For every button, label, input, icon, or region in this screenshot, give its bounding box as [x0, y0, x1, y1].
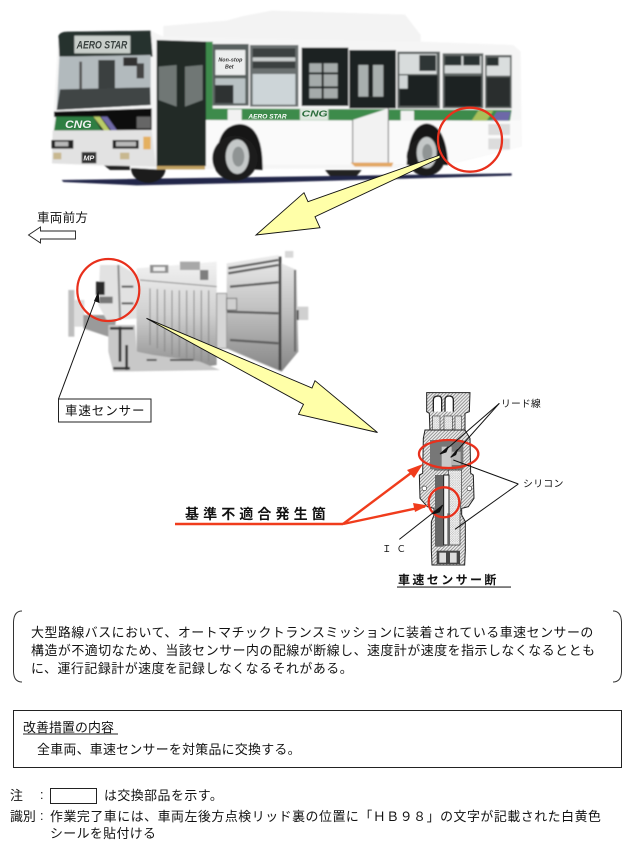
- yellow arrow from transmission to sensor: [146, 318, 378, 432]
- front casing: [98, 265, 142, 320]
- front lower: [52, 130, 156, 167]
- bus lettering: Bet: [225, 64, 234, 70]
- front mask: [58, 31, 153, 57]
- front tyre: [131, 154, 166, 183]
- bus lettering: AERO STAR: [76, 39, 128, 51]
- green band: [205, 108, 512, 121]
- callout: speed sensor label: 車速センサー: [65, 404, 145, 418]
- bus lettering: CNG: [65, 119, 92, 131]
- red arrows to failure location: [175, 464, 428, 524]
- icon: front direction arrow: [28, 227, 76, 243]
- sensor mid housing: [419, 430, 474, 565]
- rear door: [353, 108, 388, 163]
- leader lines: [399, 403, 518, 539]
- panel: defect description: に、運行記録計が速度を記録しなくなるそれがある。: [31, 661, 353, 676]
- heading: non-conformity location: 基準不適合発生箇: [185, 506, 330, 522]
- output flange: [68, 290, 74, 337]
- bus body: [52, 31, 522, 169]
- label: lead wire: リード線: [501, 397, 541, 410]
- note: replacement parts: [10, 788, 223, 804]
- windshield: [57, 55, 151, 110]
- bus lettering: [65, 39, 328, 163]
- sensor cross-section diagram: [399, 393, 518, 565]
- yellow arrow from bus to transmission: [256, 155, 440, 235]
- note: identification: :: [40, 809, 43, 823]
- red marker circles: [419, 440, 478, 517]
- bus lettering: CNG: [302, 109, 328, 119]
- transmission drawing: [68, 251, 308, 372]
- callout: speed sensor label: [58, 399, 151, 422]
- front door: [157, 40, 206, 167]
- wheels: [217, 124, 263, 170]
- panel: defect description: 構造が不適切なため、当該センサー内の配線が断線し、速度計が速度を指示しなくなるととも: [31, 643, 596, 658]
- callout: speed sensor pointer: [58, 291, 100, 399]
- internal cavity: [430, 440, 463, 469]
- connector top: [427, 393, 470, 433]
- label: IC: ＩＣ: [382, 544, 411, 555]
- roof tank: [163, 11, 421, 43]
- panel: corrective action: 改善措置の内容: [23, 720, 114, 735]
- bus lettering: AERO STAR: [247, 114, 287, 121]
- note: identification: 作業完了車には、車両左後方点検リッド裏の位置に「ＨＢ９８」の文字が記載された白黄色: [50, 809, 601, 824]
- bell housing: [227, 255, 298, 372]
- panel: corrective action: 全車両、車速センサーを対策品に交換する。: [37, 742, 301, 757]
- red circle on bus rear: [438, 108, 502, 172]
- note: identification: [10, 809, 601, 841]
- panel: defect description: 大型路線バスにおいて、オートマチックトランスミッションに装着されている車速センサーの: [31, 625, 594, 640]
- panel: corrective action: [14, 710, 622, 768]
- band labels: [228, 109, 242, 121]
- road shadow: [62, 173, 512, 185]
- title: sensor cross-section: 車速センサー断: [398, 572, 499, 587]
- red circle on transmission: [77, 259, 139, 321]
- side windows: [213, 44, 249, 106]
- lower fittings: [108, 325, 220, 372]
- panel: defect description: [14, 611, 622, 682]
- label: vehicle front: 車両前方: [37, 210, 88, 225]
- ribbed centre casing: [137, 262, 217, 368]
- note: identification: シールを貼付ける: [50, 826, 156, 841]
- note: replacement parts: :: [40, 788, 43, 802]
- bus lettering: MP: [83, 154, 94, 163]
- note: replacement parts: は交換部品を示す。: [104, 788, 223, 803]
- note: replacement parts: 注: [10, 788, 23, 803]
- label: silicone: シリコン: [523, 479, 564, 490]
- bus lettering: Non-stop: [218, 58, 243, 64]
- bus photo: [52, 11, 522, 185]
- stripe accents: [472, 111, 493, 121]
- note: identification: 識別: [10, 809, 36, 824]
